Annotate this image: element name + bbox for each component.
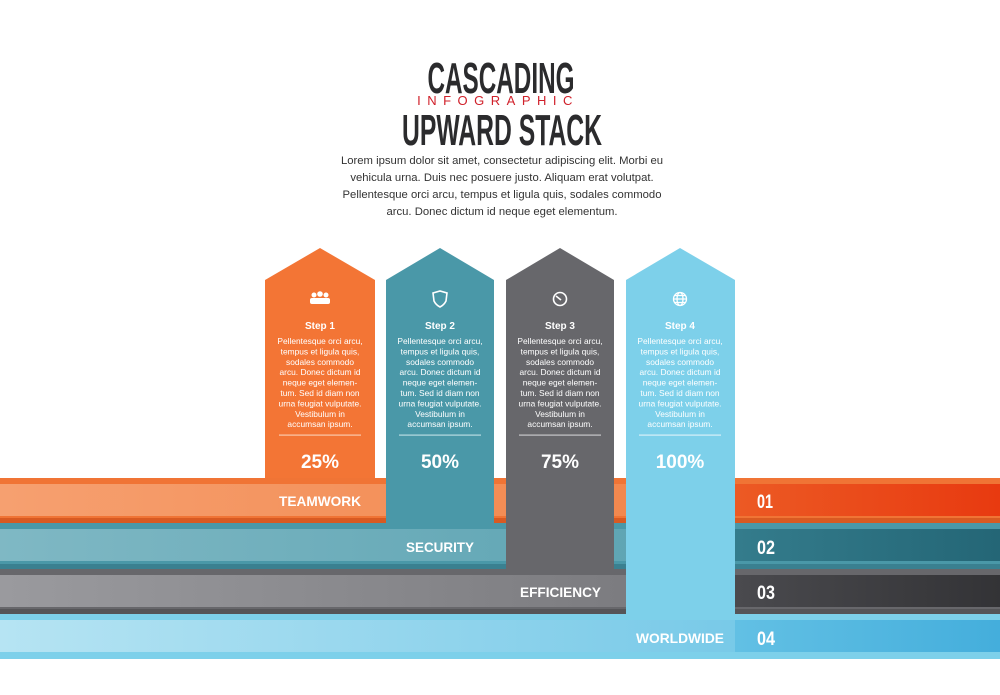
- column: step 1: 25%: [301, 452, 339, 473]
- column: step 3: Step 3: [545, 321, 575, 332]
- title: INFOGRAPHIC: [417, 93, 579, 108]
- title: [402, 54, 602, 155]
- column: step 2: neque eget elemen-: [403, 378, 477, 388]
- column: step 3: [506, 248, 614, 569]
- band: efficiency: [0, 569, 1000, 614]
- band labels: [279, 493, 724, 646]
- band labels: EFFICIENCY: [520, 584, 602, 600]
- column: step 1: urna feugiat vulputate.: [279, 398, 361, 408]
- band numbers: 03: [757, 583, 775, 604]
- column: step 2: Step 2: [425, 321, 455, 332]
- column: step 1: Pellentesque orci arcu,: [277, 336, 363, 346]
- column: step 1: tempus et ligula quis,: [281, 346, 359, 356]
- column: step 4: arcu. Donec dictum id: [640, 367, 721, 377]
- icon: team: [310, 291, 330, 304]
- column: step 3: accumsan ipsum.: [527, 419, 593, 429]
- band numbers: 02: [757, 538, 775, 559]
- column: step 3: tempus et ligula quis,: [521, 346, 599, 356]
- column: step 4: urna feugiat vulputate.: [639, 398, 721, 408]
- column: step 1: [265, 248, 375, 478]
- column: step 1: Vestibulum in: [295, 409, 345, 419]
- intro paragraph: Lorem ipsum dolor sit amet, consectetur adipiscing elit. Morbi eu: [341, 155, 663, 167]
- column: step 4: neque eget elemen-: [643, 378, 717, 388]
- column: step 3: arcu. Donec dictum id: [520, 367, 601, 377]
- title: CASCADING: [428, 54, 574, 103]
- column: step 2: accumsan ipsum.: [407, 419, 473, 429]
- icon: globe: [674, 292, 686, 306]
- intro paragraph: vehicula urna. Duis nec posuere justo. Aliquam erat volutpat.: [350, 172, 654, 184]
- column: step 2: [386, 248, 494, 523]
- band: teamwork: [0, 478, 1000, 523]
- column: step 3: tum. Sed id diam non: [520, 388, 600, 398]
- intro paragraph: [341, 155, 663, 218]
- column: step 2: sodales commodo: [406, 357, 474, 367]
- band: worldwide: [0, 614, 1000, 659]
- intro paragraph: arcu. Donec dictum id neque eget elementum.: [386, 206, 618, 218]
- column: step 4: [626, 248, 735, 614]
- band numbers: 01: [757, 492, 773, 513]
- band labels: TEAMWORK: [279, 493, 361, 509]
- column: step 4: Step 4: [665, 321, 695, 332]
- column: step 2: 50%: [421, 452, 459, 473]
- column: step 2: Vestibulum in: [415, 409, 465, 419]
- column: step 4: 100%: [656, 452, 704, 473]
- column: step 3: Pellentesque orci arcu,: [517, 336, 603, 346]
- column: step 3: sodales commodo: [526, 357, 594, 367]
- column: step 1: Step 1: [305, 321, 335, 332]
- band numbers: [757, 492, 775, 650]
- column: step 2: urna feugiat vulputate.: [399, 398, 481, 408]
- column: step 3: urna feugiat vulputate.: [519, 398, 601, 408]
- column: step 4: tum. Sed id diam non: [640, 388, 720, 398]
- band labels: WORLDWIDE: [636, 630, 724, 646]
- column: step 1: arcu. Donec dictum id: [280, 367, 361, 377]
- column: step 1: sodales commodo: [286, 357, 354, 367]
- band numbers: 04: [757, 629, 775, 650]
- column: step 3: 75%: [541, 452, 579, 473]
- icon: shield: [433, 291, 447, 307]
- column: step 4: sodales commodo: [646, 357, 714, 367]
- column: step 4: Vestibulum in: [655, 409, 705, 419]
- column: step 3: neque eget elemen-: [523, 378, 597, 388]
- column: step 4: Pellentesque orci arcu,: [637, 336, 723, 346]
- band: security: [0, 523, 1000, 569]
- column: step 2: Pellentesque orci arcu,: [397, 336, 483, 346]
- intro paragraph: Pellentesque orci arcu, tempus et ligula quis, sodales commodo: [342, 189, 662, 201]
- column: step 2: arcu. Donec dictum id: [400, 367, 481, 377]
- column: step 4: tempus et ligula quis,: [641, 346, 719, 356]
- column: step 1: neque eget elemen-: [283, 378, 357, 388]
- column: step 3: Vestibulum in: [535, 409, 585, 419]
- column: step 2: tum. Sed id diam non: [400, 388, 480, 398]
- column: step 4: accumsan ipsum.: [647, 419, 713, 429]
- title: UPWARD STACK: [402, 106, 602, 155]
- band labels: SECURITY: [406, 539, 475, 555]
- column: step 2: tempus et ligula quis,: [401, 346, 479, 356]
- column: step 1: tum. Sed id diam non: [280, 388, 360, 398]
- column: step 1: accumsan ipsum.: [287, 419, 353, 429]
- icon: clock: [554, 292, 566, 306]
